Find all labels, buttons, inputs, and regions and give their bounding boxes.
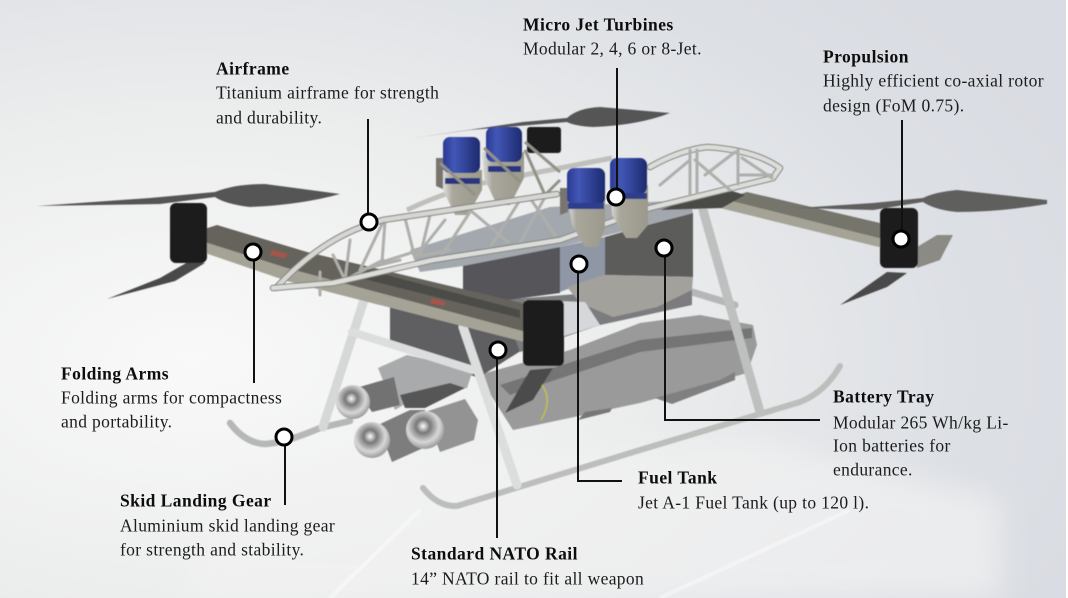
leader: Standard NATO Rail [490,342,506,538]
label: Folding Arms: and portability. [61,412,172,432]
label: Folding Arms [61,364,282,432]
right skid and legs [423,210,840,506]
label: Fuel Tank: Fuel Tank [638,468,717,488]
label: Fuel Tank: Jet A-1 Fuel Tank (up to 120 l). [638,492,869,512]
label: Standard NATO Rail [411,544,644,588]
label: Skid Landing Gear: Aluminium skid landing gear [120,516,335,536]
label: Folding Arms: Folding Arms [61,364,169,384]
label: Airframe: Titanium airframe for strength [216,82,439,102]
label: Airframe: Airframe [216,58,290,78]
label: Micro Jet Turbines [523,14,702,58]
left skid [230,421,350,444]
label: Standard NATO Rail: Standard NATO Rail [411,544,578,564]
label: Micro Jet Turbines: Modular 2, 4, 6 or 8-Jet. [523,38,702,58]
leader: Micro Jet Turbines [608,68,624,205]
label: Propulsion: Highly efficient co-axial rotor [823,70,1044,90]
leader: Skid Landing Gear [276,429,292,505]
front turbines [560,158,648,247]
label: Fuel Tank [638,468,869,512]
label: Skid Landing Gear: Skid Landing Gear [120,490,272,510]
rear truss and rear turbines [407,127,612,215]
label: Airframe: and durability. [216,108,322,128]
right arm [660,188,887,249]
leader: Fuel Tank [571,256,622,481]
label: Battery Tray: Battery Tray [833,386,934,406]
label: Airframe [216,58,439,128]
left arm [170,225,530,343]
label: Skid Landing Gear: for strength and stability. [120,540,304,560]
right rotor [797,190,1047,305]
label: Skid Landing Gear [120,490,335,560]
drone illustration [37,107,1047,506]
label: Propulsion: Propulsion [823,46,909,66]
leader: Propulsion [893,120,909,247]
leader: Airframe [361,119,377,230]
label: Propulsion: design (FoM 0.75). [823,96,964,116]
label: Battery Tray: Ion batteries for [833,436,951,456]
rear legs [323,292,735,427]
label: Battery Tray: endurance. [833,460,913,480]
left rotor [37,184,340,299]
label: Battery Tray: Modular 265 Wh/kg Li- [833,412,1009,432]
rear rotor [413,107,670,153]
lower weapon pod [478,315,757,430]
cylinders and chrome noses [336,355,478,462]
leader: Folding Arms [245,244,261,383]
front rotor [505,300,564,420]
label: Standard NATO Rail: 14” NATO rail to fit all weapon [411,568,644,588]
label: Micro Jet Turbines: Micro Jet Turbines [523,14,674,34]
label: Propulsion [823,46,1044,116]
near truss frame [273,147,780,295]
cross bar [352,332,473,370]
label: Folding Arms: Folding arms for compactness [61,388,282,408]
label: Battery Tray [833,386,1009,480]
central body [390,200,693,378]
leader: Battery Tray [656,240,820,420]
